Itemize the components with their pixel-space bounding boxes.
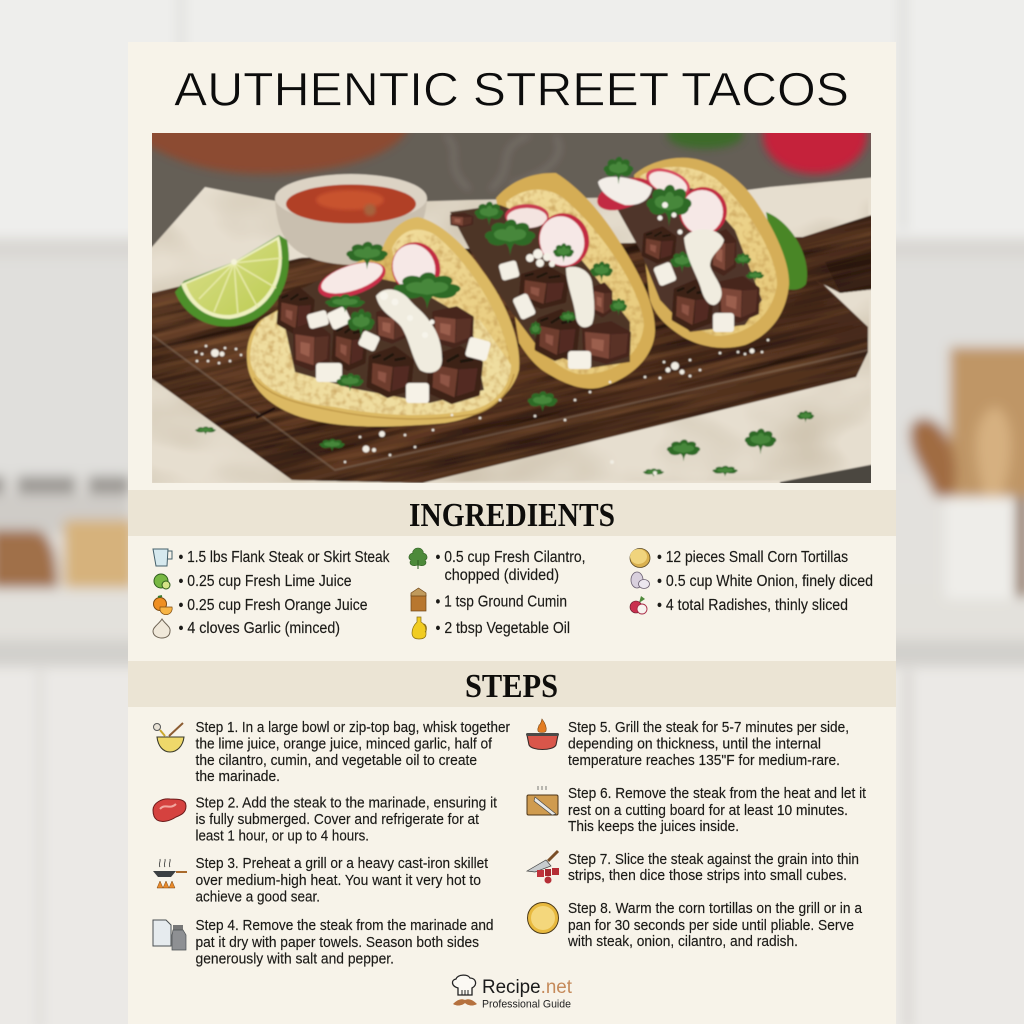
- step 6: This keeps the juices inside.: [568, 819, 739, 835]
- step 3: achieve a good sear.: [196, 890, 320, 906]
- step 5: depending on thickness, until the internal: [568, 736, 821, 752]
- step 4: Step 4. Remove the steak from the marinade and: [196, 918, 494, 934]
- step 4: [153, 918, 494, 968]
- icon: mixing bowl: [154, 723, 184, 752]
- icon: radish: [630, 596, 647, 614]
- icon: cutting board with knife: [527, 786, 558, 815]
- heading band: ingredients: [128, 490, 896, 536]
- step 4: generously with salt and pepper.: [196, 952, 394, 968]
- ingredients column 3: • 12 pieces Small Corn Tortillas: [657, 549, 848, 566]
- ingredients column 1: [153, 549, 390, 638]
- icon: skillet on flame: [153, 859, 187, 888]
- ingredients column 1: • 1.5 lbs Flank Steak or Skirt Steak: [178, 549, 390, 566]
- icon: oil bottle: [412, 617, 426, 639]
- middle taco: [450, 173, 655, 389]
- ingredients column 3: • 0.5 cup White Onion, finely diced: [657, 573, 873, 590]
- icon: orange: [154, 596, 172, 615]
- step 2: [153, 796, 497, 844]
- icon: flame over grill: [526, 719, 559, 750]
- step 1: the cilantro, cumin, and vegetable oil to create: [196, 753, 477, 769]
- step 1: the marinade.: [196, 769, 280, 785]
- ingredients column 2: • 2 tbsp Vegetable Oil: [436, 620, 570, 637]
- step 8: pan for 30 seconds per side until pliable. Serve: [568, 918, 854, 934]
- ingredients column 2: • 1 tsp Ground Cumin: [436, 594, 567, 610]
- step 2: Step 2. Add the steak to the marinade, ensuring it: [196, 796, 497, 812]
- ingredients column 1: • 0.25 cup Fresh Orange Juice: [178, 597, 368, 614]
- icon: steak: [153, 799, 186, 821]
- footer logo: Recipe.net: [482, 977, 573, 998]
- step 2: is fully submerged. Cover and refrigerate for at: [196, 812, 479, 828]
- cutting board: [152, 214, 871, 483]
- icon: lime: [154, 574, 170, 589]
- heading band: steps: [128, 661, 896, 707]
- ingredients column 1: • 4 cloves Garlic (minced): [178, 620, 340, 637]
- step 1: Step 1. In a large bowl or zip-top bag, whisk together: [196, 720, 510, 736]
- step 7: strips, then dice those strips into small cubes.: [568, 868, 847, 884]
- icon: chef hat with moustache: [452, 975, 477, 1006]
- icon: tortillas: [630, 548, 650, 568]
- icon: paper towel and pepper shaker: [153, 920, 186, 950]
- step 5: [526, 719, 849, 769]
- steam: [445, 135, 559, 190]
- back taco: [593, 157, 789, 348]
- lime behind tacos: [766, 212, 807, 290]
- heading band: steps: STEPS: [465, 668, 558, 705]
- icon: chef knife and diced steak: [527, 851, 559, 884]
- footer logo: Professional Guide: [482, 998, 571, 1010]
- step 4: pat it dry with paper towels. Season both sides: [196, 935, 479, 951]
- step 7: [527, 851, 859, 884]
- step 1: the lime juice, orange juice, minced garlic, half of: [196, 736, 493, 752]
- step 6: Step 6. Remove the steak from the heat and let it: [568, 786, 866, 802]
- icon: cumin jar: [411, 588, 426, 611]
- step 3: over medium-high heat. You want it very hot to: [196, 873, 481, 889]
- scattered cilantro: [195, 391, 814, 477]
- step 3: [153, 856, 488, 906]
- step 2: least 1 hour, or up to 4 hours.: [196, 828, 369, 844]
- step 5: Step 5. Grill the steak for 5-7 minutes per side,: [568, 720, 849, 736]
- ingredients column 3: [630, 548, 873, 614]
- parchment paper: [140, 170, 885, 496]
- hero photo: three street tacos on a wooden board: [152, 133, 871, 483]
- icon: cilantro: [409, 548, 427, 569]
- step 8: Step 8. Warm the corn tortillas on the grill or in a: [568, 901, 863, 917]
- front taco: [247, 217, 519, 427]
- step 5: temperature reaches 135"F for medium-rare.: [568, 753, 840, 769]
- icon: measuring jug: [153, 549, 172, 566]
- step 8: with steak, onion, cilantro, and radish.: [567, 934, 798, 950]
- step 8: [528, 901, 863, 950]
- step 6: [527, 786, 866, 835]
- salsa bowl: [275, 174, 427, 265]
- ingredients column 2: [409, 548, 586, 639]
- icon: garlic: [153, 619, 170, 638]
- lime wedge: [175, 235, 289, 327]
- step 6: rest on a cutting board for at least 10 minutes.: [568, 803, 848, 819]
- poster panel: [128, 42, 896, 1024]
- step 7: Step 7. Slice the steak against the grain into thin: [568, 852, 859, 868]
- ingredients column 1: • 0.25 cup Fresh Lime Juice: [178, 573, 352, 590]
- step 1: [154, 720, 510, 785]
- ingredients column 2: • 0.5 cup Fresh Cilantro,: [436, 549, 586, 566]
- step 3: Step 3. Preheat a grill or a heavy cast-iron skillet: [196, 856, 488, 872]
- icon: corn tortilla: [528, 902, 558, 934]
- cheese crumbles: [195, 339, 769, 475]
- icon: onion: [631, 572, 650, 588]
- ingredients column 3: • 4 total Radishes, thinly sliced: [657, 597, 848, 614]
- footer logo: [452, 975, 573, 1010]
- ingredients column 2: chopped (divided): [444, 567, 559, 584]
- title: AUTHENTIC STREET TACOS: [174, 64, 849, 116]
- heading band: ingredients: INGREDIENTS: [409, 497, 615, 534]
